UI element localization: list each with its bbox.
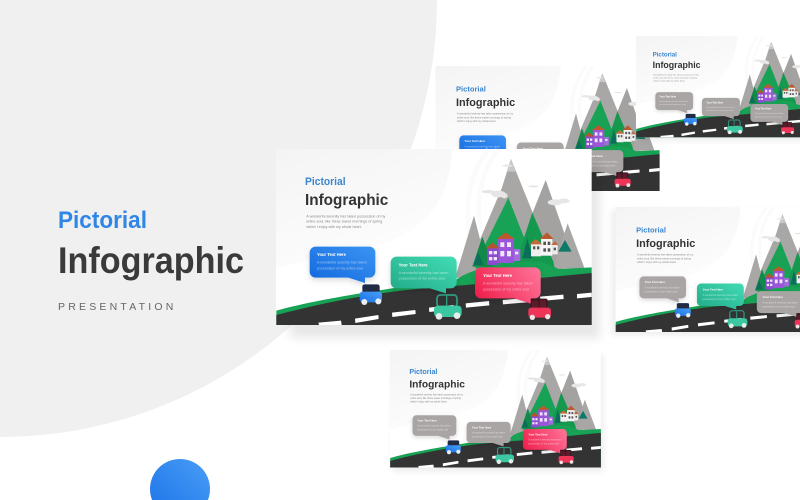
callout: grey 3: A wonderful serenity has taken xyxy=(755,112,784,115)
text: slide heading: which I enjoy with my whole heart. xyxy=(306,225,362,229)
text: slide heading: which I enjoy with my whole heart. xyxy=(410,401,448,404)
text: slide heading: Pictorial xyxy=(305,176,346,188)
main title block xyxy=(58,207,244,313)
callout: grey 3 xyxy=(577,150,623,176)
callout: grey 3: A wonderful serenity has taken xyxy=(582,159,618,163)
callout: grey 1: A wonderful serenity has taken xyxy=(660,100,689,103)
heading: Pictorial: Pictorial xyxy=(58,207,147,234)
text: slide heading: A wonderful serenity has taken possession of my xyxy=(637,253,694,257)
text: slide heading: which I enjoy with my whole heart. xyxy=(653,79,686,82)
callout: grey 2: Your Text Here xyxy=(523,146,543,150)
callout: red: Your Text Here xyxy=(528,432,548,436)
text: slide heading: Pictorial xyxy=(409,368,437,376)
text: slide heading xyxy=(636,226,695,264)
callout: grey 2 xyxy=(467,422,511,446)
callout: red xyxy=(523,429,567,453)
slide preview: main large xyxy=(276,149,600,338)
callout: grey 3: possession of my entire soul xyxy=(763,304,796,308)
callout: grey 1: Your Text Here xyxy=(645,280,665,284)
callout: grey 1: possession of my entire soul xyxy=(417,428,449,431)
text: slide heading: Infographic xyxy=(456,97,515,109)
callout: green xyxy=(391,257,457,293)
callout: blue: possession of my entire soul xyxy=(465,148,498,152)
subheading: Presentation: PRESENTATION xyxy=(58,301,177,313)
callout: grey 2: A wonderful serenity has taken xyxy=(472,431,506,434)
text: slide heading: Infographic xyxy=(653,60,701,70)
callout: grey 2: Your Text Here xyxy=(707,101,724,104)
text: slide heading xyxy=(456,85,515,123)
callout: blue: A wonderful serenity has taken xyxy=(317,261,367,265)
callout: grey 1 xyxy=(655,92,693,113)
text: slide heading: Pictorial xyxy=(636,226,666,235)
callout: blue: Your Text Here xyxy=(317,252,347,257)
callout: grey 3 xyxy=(750,104,788,125)
text: slide heading: A wonderful serenity has taken possession of my xyxy=(653,73,700,76)
text: slide heading xyxy=(409,368,465,404)
callout: blue: A wonderful serenity has taken xyxy=(465,144,500,148)
callout: red: A wonderful serenity has taken xyxy=(483,282,533,286)
callout: green: possession of my entire soul xyxy=(703,297,736,301)
callout: grey 3: Your Text Here xyxy=(582,154,603,158)
background grey circle xyxy=(0,0,437,437)
callout: grey 3: Your Text Here xyxy=(755,108,772,111)
callout: red: Your Text Here xyxy=(483,273,513,278)
callout: green: Your Text Here xyxy=(399,262,428,267)
callout: green: A wonderful serenity has taken xyxy=(703,293,738,297)
callout: blue xyxy=(310,247,375,283)
text: slide heading: Infographic xyxy=(409,379,465,390)
slide preview: right xyxy=(611,207,800,335)
callout: grey 3: Your Text Here xyxy=(763,295,783,299)
callout: grey 1: A wonderful serenity has taken xyxy=(417,425,451,428)
text: slide heading: entire soul, like these sweet mornings of spring xyxy=(306,220,382,224)
decorative blue circle xyxy=(150,459,210,500)
callout: green: possession of my entire soul xyxy=(399,277,445,281)
callout: grey 3: possession of my entire soul xyxy=(582,163,616,167)
slide preview: top right xyxy=(636,36,800,141)
text: slide heading: A wonderful serenity has taken possession of my xyxy=(410,394,464,397)
callout: grey 3 xyxy=(757,291,800,317)
callout: grey 1 xyxy=(412,415,456,439)
text: slide heading: entire soul, like these sweet mornings of spring xyxy=(457,115,511,119)
text: slide heading: entire soul, like these sweet mornings of spring xyxy=(410,397,462,400)
callout: grey 2: possession of my entire soul xyxy=(523,156,556,160)
text: slide heading: Infographic xyxy=(636,238,695,250)
text: slide heading: A wonderful serenity has taken possession of my xyxy=(457,112,514,116)
text: slide heading: which I enjoy with my whole heart. xyxy=(457,119,497,123)
callout: blue: Your Text Here xyxy=(465,139,485,143)
callout: red: possession of my entire soul xyxy=(483,287,529,291)
text: slide heading: which I enjoy with my whole heart. xyxy=(637,260,677,264)
text: slide heading: Infographic xyxy=(305,192,389,209)
callout: grey 2 xyxy=(702,98,740,119)
callout: grey 2: A wonderful serenity has taken xyxy=(707,106,736,109)
text: slide heading: Pictorial xyxy=(456,85,486,94)
callout: red xyxy=(475,267,541,304)
text: slide heading xyxy=(305,176,389,229)
callout: green xyxy=(697,283,744,310)
heading: Infographic: Infographic xyxy=(58,240,244,281)
callout: red: A wonderful serenity has taken xyxy=(528,439,562,442)
callout: grey 2: possession of my entire soul xyxy=(472,435,503,438)
slide preview: bottom xyxy=(390,350,604,472)
text: slide heading xyxy=(653,52,701,82)
callout: grey 3: possession of my entire soul xyxy=(755,115,782,118)
callout: grey 1: Your Text Here xyxy=(660,96,677,99)
callout: green: A wonderful serenity has taken xyxy=(399,271,448,275)
callout: green: Your Text Here xyxy=(703,287,723,291)
text: slide heading: Pictorial xyxy=(653,52,677,59)
callout: grey 1: possession of my entire soul xyxy=(660,103,687,106)
callout: grey 2: A wonderful serenity has taken xyxy=(523,152,558,156)
callout: grey 2: possession of my entire soul xyxy=(707,109,733,112)
callout: grey 1 xyxy=(639,276,686,302)
callout: blue xyxy=(459,135,506,161)
callout: blue: possession of my entire soul xyxy=(317,266,363,270)
text: slide heading: entire soul, like these sweet mornings of spring xyxy=(653,76,698,79)
callout: grey 2 xyxy=(517,142,564,169)
text: slide heading: entire soul, like these sweet mornings of spring xyxy=(637,256,692,260)
slide preview: top centre xyxy=(435,66,660,191)
callout: grey 2: Your Text Here xyxy=(472,425,492,429)
callout: grey 1: A wonderful serenity has taken xyxy=(645,285,681,289)
callout: grey 3: A wonderful serenity has taken xyxy=(763,300,798,304)
callout: grey 1: Your Text Here xyxy=(417,418,437,422)
text: slide heading: A wonderful serenity has taken possession of my xyxy=(306,214,386,218)
callout: red: possession of my entire soul xyxy=(528,442,559,445)
callout: grey 1: possession of my entire soul xyxy=(645,289,678,293)
